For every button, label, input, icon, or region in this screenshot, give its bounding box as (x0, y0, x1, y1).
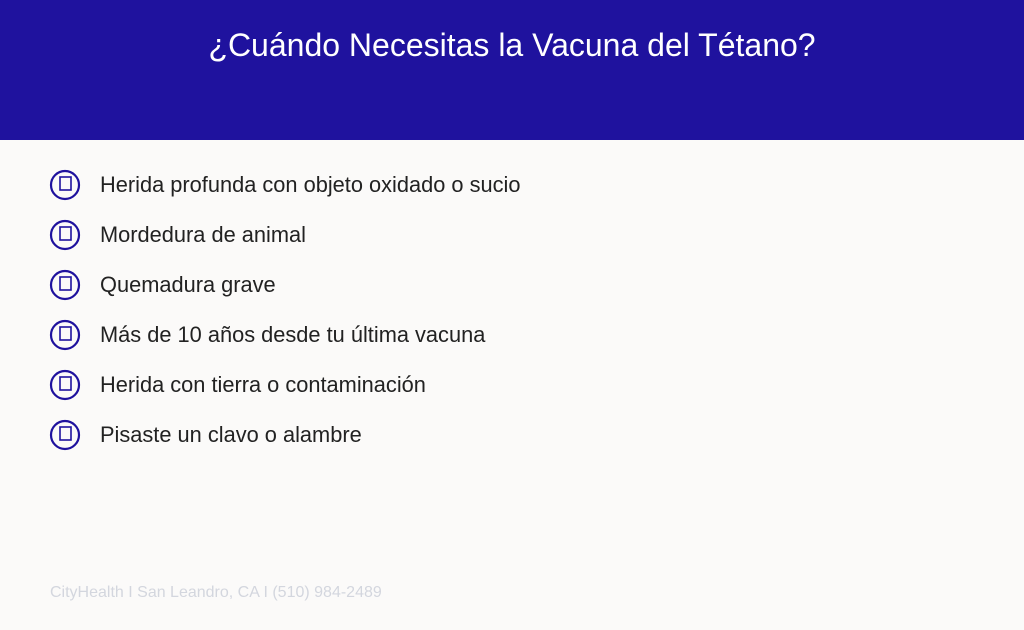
item 3 (50, 270, 276, 300)
item 4: Más de 10 años desde tu última vacuna (100, 322, 485, 347)
item 3: Quemadura grave (100, 272, 276, 297)
header band (0, 0, 1024, 140)
item 2 (50, 220, 306, 250)
checklist (50, 170, 520, 450)
item 6: Pisaste un clavo o alambre (100, 422, 362, 447)
item 1: Herida profunda con objeto oxidado o sucio (100, 172, 520, 197)
item 6 (50, 420, 362, 450)
item 2: Mordedura de animal (100, 222, 306, 247)
title: ¿Cuándo Necesitas la Vacuna del Tétano? (208, 27, 816, 63)
item 5: Herida con tierra o contaminación (100, 372, 426, 397)
item 5 (50, 370, 426, 400)
footer: CityHealth I San Leandro, CA I (510) 984-2489 (50, 584, 382, 601)
